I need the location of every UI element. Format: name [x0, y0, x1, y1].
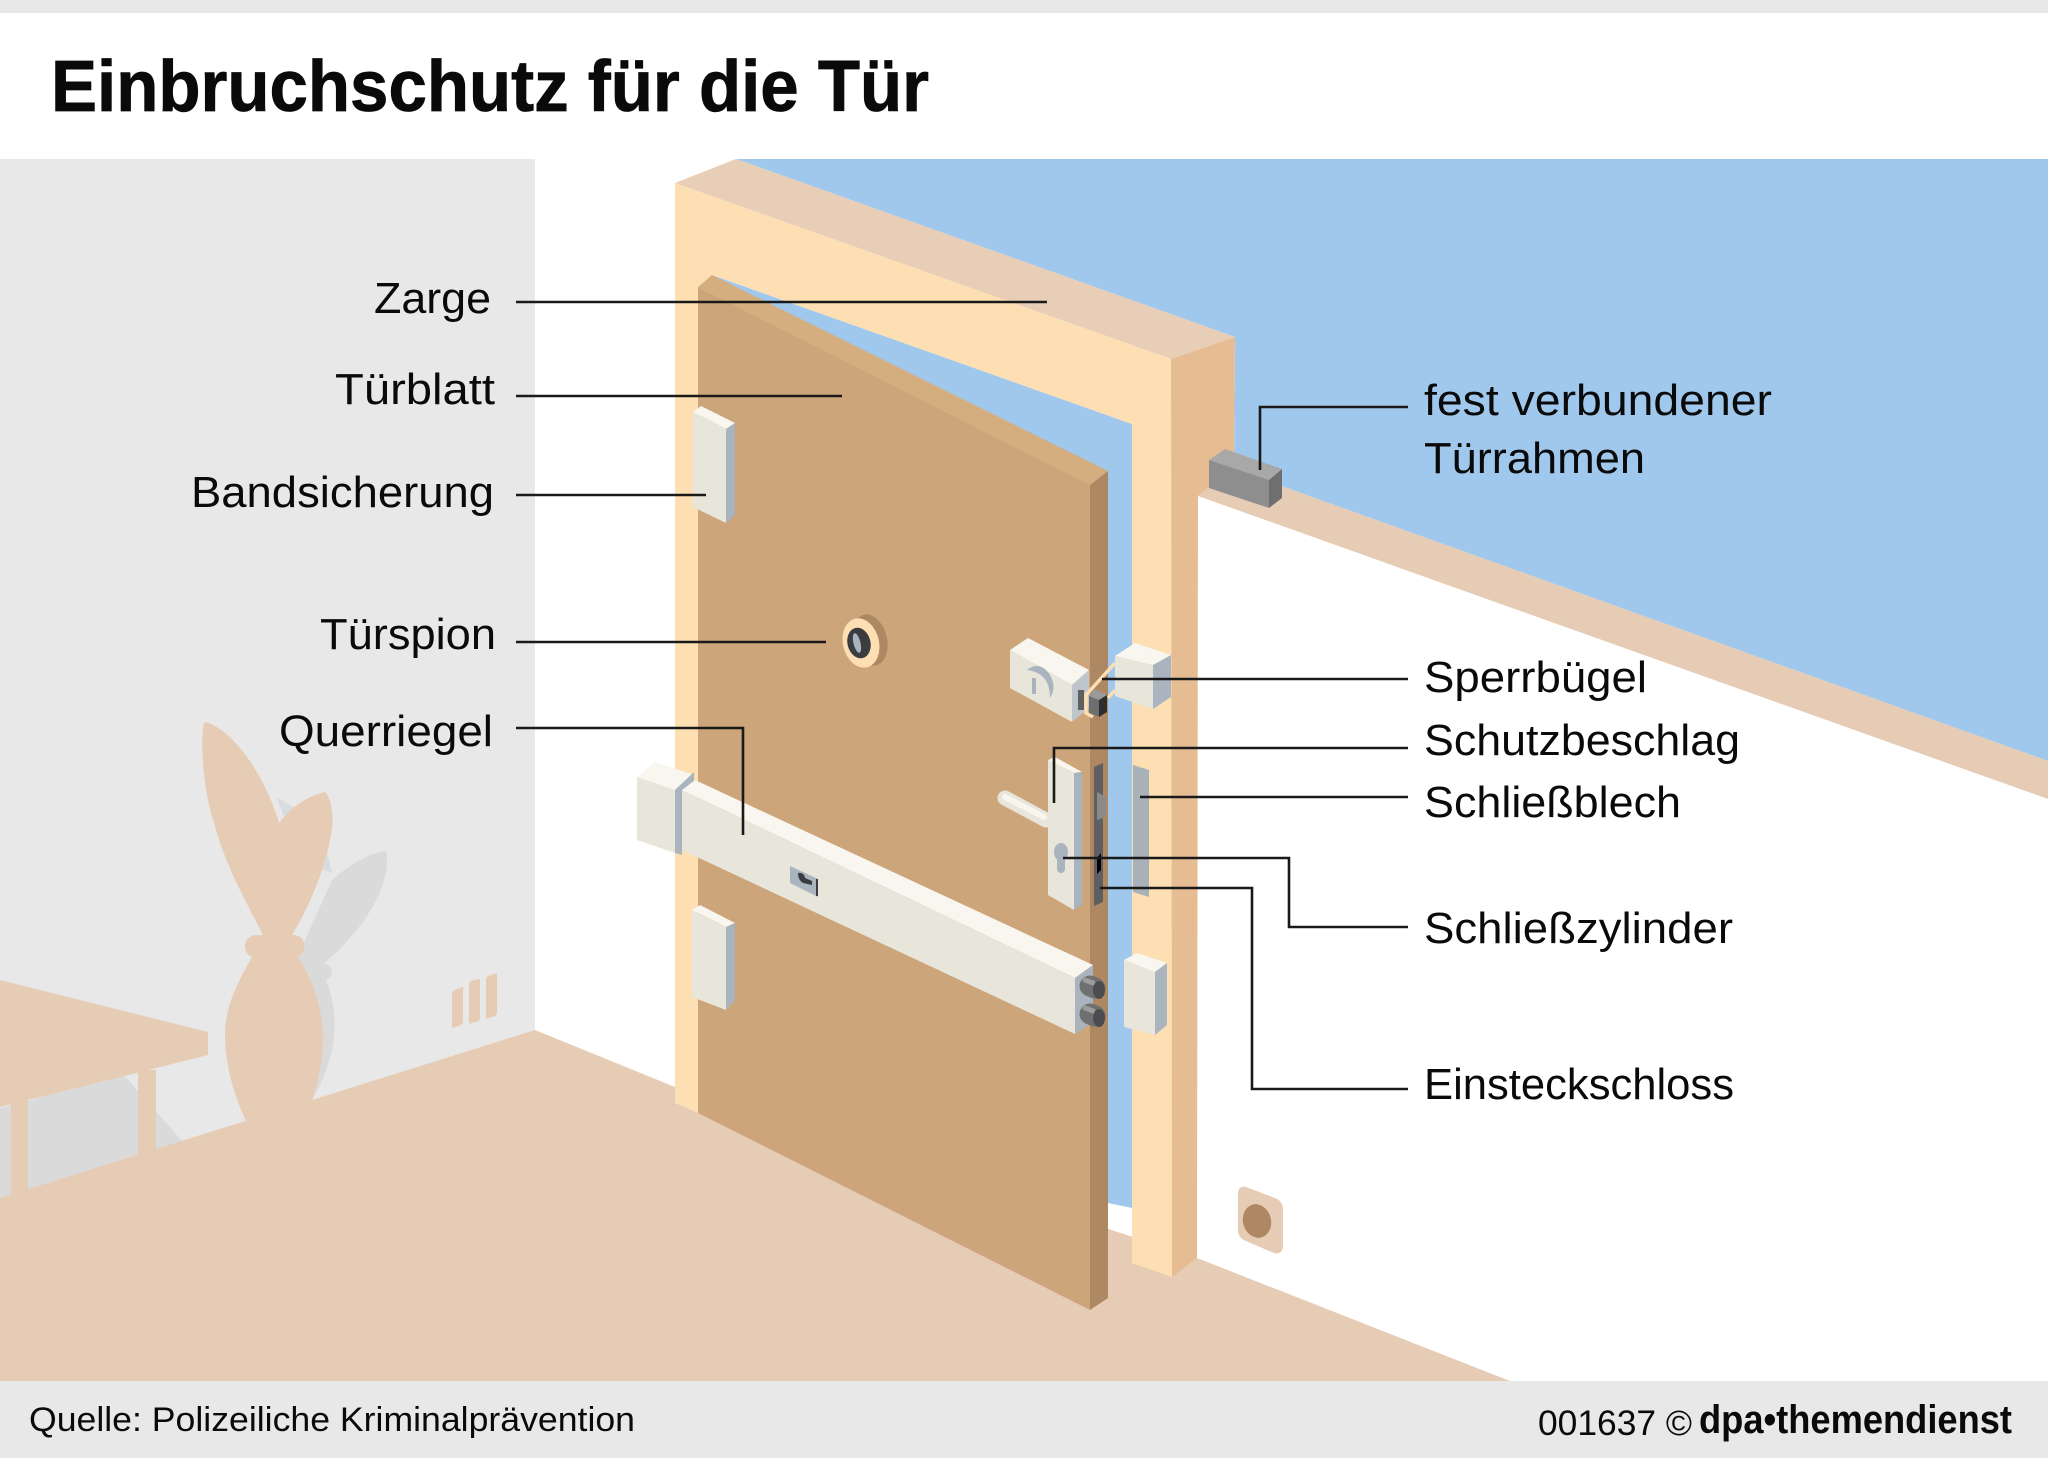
frame front face	[675, 183, 1172, 1277]
plant shadow	[277, 798, 387, 1100]
panel: blue outside wall	[736, 159, 2048, 761]
upper Bandsicherung	[693, 406, 735, 523]
copyright number: 001637 ©	[1538, 1404, 1692, 1443]
footer bar	[0, 1381, 2048, 1458]
door front	[698, 287, 1090, 1310]
door opening blue	[712, 275, 1132, 1208]
Einsteckschloss	[1094, 763, 1106, 906]
label: Bandsicherung: Bandsicherung	[191, 469, 494, 517]
handle	[1005, 798, 1046, 820]
leader: Türspion	[516, 641, 826, 643]
floor	[0, 1030, 1510, 1381]
plant leaves	[0, 722, 333, 1210]
panel: room interior left wall	[0, 159, 535, 1219]
label: Zarge: Zarge	[374, 275, 491, 323]
Schließblech	[1133, 765, 1149, 897]
top strip	[0, 0, 2048, 13]
label: Schutzbeschlag: Schutzbeschlag	[1424, 717, 1740, 765]
label: Türspion: Türspion	[320, 611, 496, 659]
door top edge	[698, 275, 1108, 485]
Sperrbügel	[1010, 638, 1171, 722]
bar	[682, 780, 1093, 978]
label: fest verbundener Türrahmen: Türrahmen	[1424, 435, 1645, 483]
small cube	[1089, 689, 1107, 700]
panel: door leaf (Türblatt)	[698, 275, 1108, 1310]
leader: Schließzylinder	[1063, 858, 1408, 927]
hoop	[1086, 663, 1115, 717]
leader: Bandsicherung	[516, 494, 706, 496]
labels	[191, 275, 1772, 1109]
label: Schließzylinder: Schließzylinder	[1424, 905, 1733, 953]
bolts	[1085, 980, 1105, 1027]
leader: Türblatt	[516, 395, 842, 397]
wall socket	[1238, 1187, 1283, 1253]
bar lock plate	[790, 866, 818, 897]
leader: Schließblech	[1140, 796, 1408, 798]
Türspion	[837, 611, 893, 672]
lock box	[1010, 638, 1089, 685]
table top	[0, 980, 208, 1107]
label: Türblatt: Türblatt	[335, 366, 495, 414]
leader: Querriegel	[516, 728, 743, 835]
panel: door frame (Zarge)	[675, 159, 1235, 1277]
lower Bandsicherung	[692, 905, 735, 1010]
strike keep for Querriegel	[1124, 953, 1167, 1035]
bar end block	[637, 762, 694, 790]
vase	[225, 935, 323, 1160]
frame top face	[675, 159, 1235, 359]
label: Sperrbügel: Sperrbügel	[1424, 654, 1647, 702]
wall top band	[1198, 469, 2048, 799]
keyhole: Schließzylinder	[1054, 843, 1068, 873]
leader: Zarge	[516, 301, 1047, 303]
leader lines	[516, 302, 1408, 1089]
label: Schließblech: Schließblech	[1424, 779, 1681, 827]
table legs	[138, 1070, 156, 1160]
label: Querriegel: Querriegel	[279, 708, 493, 756]
label: fest verbundener Türrahmen: fest verbundener	[1424, 377, 1772, 425]
Querriegel	[637, 762, 1105, 1034]
leader: Sperrbügel	[1102, 678, 1408, 680]
dpa logo text: dpa•themendienst	[1699, 1398, 2012, 1442]
label: Einsteckschloss: Einsteckschloss	[1424, 1061, 1734, 1109]
room decor: plant, vase, table	[0, 722, 497, 1214]
title: Einbruchschutz für die Tür	[51, 47, 929, 127]
leader: Einsteckschloss	[1100, 888, 1408, 1089]
vent	[452, 973, 497, 1028]
leader: Schutzbeschlag	[1054, 748, 1408, 803]
table shadow	[0, 1105, 11, 1214]
Schutzbeschlag	[1005, 757, 1082, 910]
leader: fest verbundener Türrahmen	[1260, 407, 1408, 470]
frame side face	[1171, 337, 1235, 1277]
door side edge	[1090, 471, 1108, 1310]
right catch block	[1115, 643, 1171, 665]
source text: Quelle: Polizeiliche Kriminalprävention	[29, 1401, 635, 1439]
gray frame anchor block	[1209, 449, 1282, 508]
